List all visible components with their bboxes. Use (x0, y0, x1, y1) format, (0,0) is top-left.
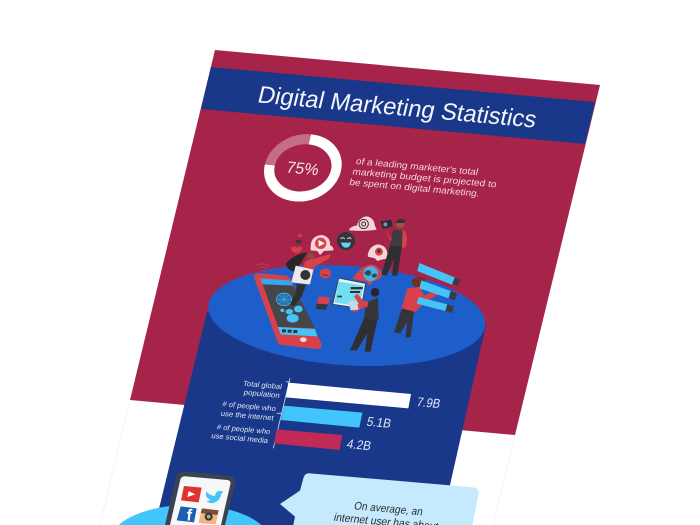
panel: crimson poster background (130, 50, 600, 435)
bar: people who use social media: # of people who (216, 422, 271, 436)
bar: people who use the internet: use the internet (220, 409, 276, 423)
icon: globe bubble (352, 264, 382, 286)
icon: smartphone (254, 273, 322, 349)
bar chart: population and internet use (210, 378, 442, 453)
icon: facebook: f (186, 506, 193, 524)
figure: man with panels (394, 277, 441, 338)
bar: people who use the internet (219, 399, 393, 431)
bar: people who use social media: use social media (210, 431, 270, 445)
header band (201, 67, 595, 144)
text block: budget statistic: marketing budget is projected to (351, 166, 498, 189)
figure: man with tablet (348, 288, 379, 352)
bar: people who use the internet: # of people who (222, 399, 277, 413)
cylinder body (155, 312, 486, 525)
donut chart: 75%: 75% (284, 159, 321, 179)
text block: budget statistic: of a leading marketer's total (355, 156, 479, 177)
text block: budget statistic: be spent on digital marketing. (348, 177, 481, 199)
bar: total global population (240, 379, 442, 411)
text block: budget statistic (348, 156, 500, 200)
icon: facebook (177, 506, 197, 524)
icon: web page card (333, 278, 366, 309)
bar: total global population: population (243, 388, 281, 400)
icon: wifi signal (256, 264, 270, 272)
social media phone on cyan mound (119, 472, 261, 525)
icon: cyan feature panels (417, 263, 461, 313)
illustration: people and social media (254, 216, 461, 352)
callout: speech bubble: On average, an (353, 500, 424, 518)
icon: smiling face (337, 232, 355, 250)
icon: play bubble (311, 235, 333, 255)
icon: youtube (181, 486, 202, 502)
icon: hearts (291, 234, 302, 254)
donut chart: 75% (263, 136, 343, 199)
icon: phone (165, 472, 236, 525)
bar: people who use the internet: 5.1B (365, 414, 393, 431)
icon: small items on the table (316, 268, 331, 310)
icon: email bubble (349, 216, 377, 231)
figure: man with megaphone (381, 219, 407, 276)
cylinder top (197, 254, 497, 377)
callout: speech bubble (280, 473, 479, 525)
icon: twitter (206, 491, 223, 503)
figure: woman on phone (286, 252, 331, 306)
bar: total global population: Total global (242, 379, 283, 391)
icon: location bubble (368, 244, 388, 261)
bar: total global population: 7.9B (415, 394, 442, 411)
bar: people who use social media: 4.2B (345, 436, 373, 453)
title: Digital Marketing Statistics (255, 82, 540, 133)
bar: people who use social media (210, 422, 373, 453)
icon: instagram (199, 508, 219, 524)
